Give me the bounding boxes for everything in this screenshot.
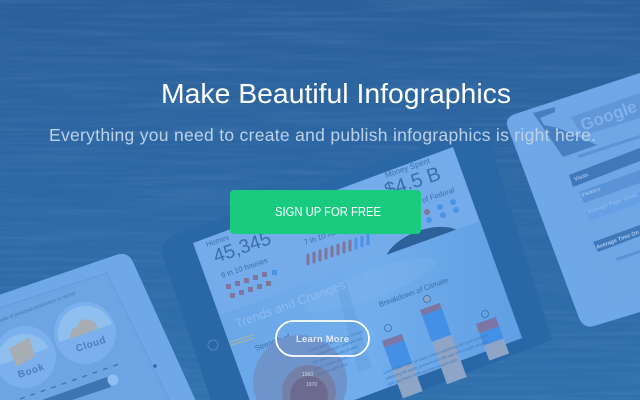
screen heading bar [571,93,640,136]
coin icons [424,199,459,223]
stat: money: $4.5 B [382,163,444,202]
nested circle chart [253,335,347,400]
circle: book [0,326,56,388]
table rows: Average Time On [596,230,640,251]
text: strength of: Strength of [254,332,292,353]
lorem text under bars: nibh quis libero mollis sit amet consect dolor [387,358,459,387]
left tablet [0,254,200,400]
center tablet [162,127,552,400]
lorem text columns: praesent quam dolor [316,362,349,377]
table rows: Visits [574,172,589,183]
bar chart [382,303,509,398]
stat: money: of Federal [421,185,456,205]
small rule [230,335,254,345]
lorem text columns: adipiscing elit quam, praesent sed [310,337,362,359]
column divider [336,282,372,372]
table rows: Visitors [581,186,602,199]
button: sign up [230,190,421,234]
circle: cloud [54,302,116,364]
home button [208,340,218,350]
stat: homes: 9 in 10 houses [220,255,269,280]
heading: breakdown of climate: Breakdown of Climate [378,275,450,309]
dark image blob [378,217,472,287]
lorem text under bars: adipiscing elit quam, praesent sed nibh quis libero mollis sit amet [385,340,490,381]
nested circle chart: 1960 [302,372,313,378]
lorem text columns: Lorem ipsum dolor sit amet, consect [308,329,364,353]
ribbon [42,374,118,400]
title: Make Beautiful Infographics [161,78,511,109]
stat: people: 7 in 10 households [303,218,365,247]
corner frame [533,107,597,157]
weather icons [384,296,488,332]
dashed line [20,363,122,399]
lorem text columns [308,329,364,377]
button: sign up: SIGN UP FOR FREE [275,205,381,219]
highlight haze [299,248,441,322]
table rows: Average Page Views [587,192,639,216]
stat: homes: 45,345 [210,227,274,268]
tablet screen [193,147,522,400]
heading: trends and changes: Trends and Changes [233,278,347,331]
button: learn more [276,321,369,356]
table rows [569,135,640,261]
heading: Google: Google [578,97,639,135]
button: learn more: Learn More [296,334,349,345]
circle: book: Book [17,362,46,381]
right tablet [507,73,640,327]
home button [153,364,157,368]
house icons [226,270,277,298]
lorem text columns: amet, consect adipiscing elit [314,352,358,371]
subtitle: Everything you need to create and publish infographics is right here. [49,125,596,145]
nested circle chart: 1970 [306,382,317,388]
stat: money: Money Spent [384,156,432,180]
circle: cloud: Cloud [75,335,108,355]
people icons [308,235,368,264]
lorem text under bars: Lorem ipsum dolor sit amet, consect adipiscing elit quam praesent [383,333,490,375]
caption line: sets of personal production in recent [0,290,77,324]
lower screen section [220,221,522,400]
lorem text columns: nibh quis libero mollis sit amet [312,345,358,365]
stat: homes: Homes [205,233,230,249]
stat: money [382,156,456,205]
